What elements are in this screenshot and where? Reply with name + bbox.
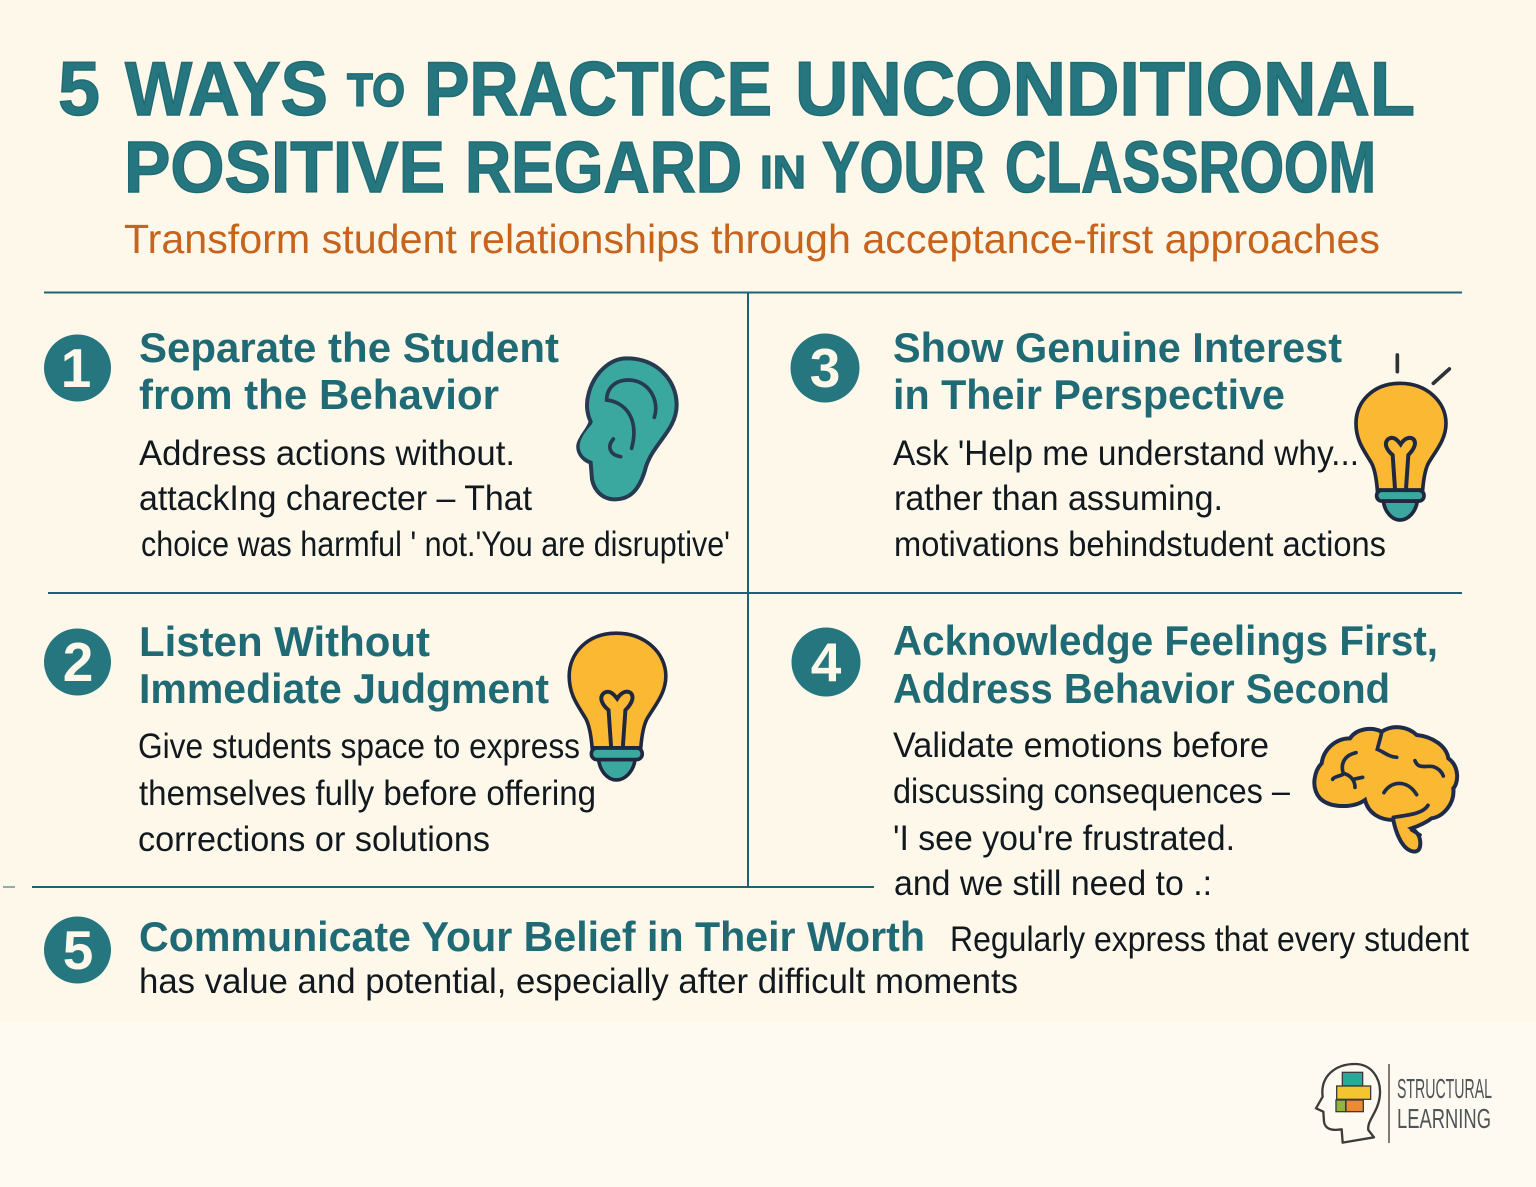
badge 4 <box>792 628 860 696</box>
icon: light bulb <box>1356 355 1449 520</box>
badge 5: 5 <box>63 919 93 981</box>
body 4: Validate emotions before <box>893 726 1269 765</box>
body 2 <box>138 727 596 859</box>
body 4 <box>893 726 1290 903</box>
title: 5 <box>58 47 100 132</box>
body 2: themselves fully before offering <box>139 774 596 813</box>
title: PRACTICE <box>424 47 772 132</box>
body 1 <box>139 434 730 564</box>
icon: head with blocks <box>1316 1064 1380 1143</box>
logo wordmark <box>1397 1073 1492 1134</box>
body 2: Give students space to express <box>138 727 580 766</box>
icon: brain <box>1314 727 1457 852</box>
title: CLASSROOM <box>1005 128 1376 208</box>
body 4: and we still need to .: <box>894 864 1212 903</box>
body 4: 'I see you're frustrated. <box>893 819 1235 858</box>
body 3: rather than assuming. <box>894 479 1223 518</box>
heading 1: Separate the Student <box>139 324 559 371</box>
title <box>58 47 1415 208</box>
heading 4 <box>893 617 1438 712</box>
panel: way 3 <box>790 324 1449 564</box>
heading 4: Acknowledge Feelings First, <box>893 617 1438 664</box>
icon: light bulb <box>569 633 666 780</box>
panel: way 2 <box>44 618 666 859</box>
body 3: Ask 'Help me understand why... <box>893 434 1359 473</box>
heading 1: from the Behavior <box>139 371 499 418</box>
body 3: motivations behindstudent actions <box>894 525 1386 564</box>
heading 2: Immediate Judgment <box>139 665 549 712</box>
heading 2: Listen Without <box>139 618 430 665</box>
body 5: Regularly express that every student <box>950 920 1469 959</box>
badge 5 <box>44 916 111 984</box>
title: REGARD <box>465 128 742 208</box>
logo wordmark: LEARNING <box>1397 1103 1491 1134</box>
badge 3 <box>790 334 860 402</box>
heading 3: Show Genuine Interest <box>893 324 1342 371</box>
badge 4: 4 <box>811 631 842 693</box>
panel: way 4 <box>792 617 1457 903</box>
subtitle: Transform student relationships through acceptance-first approaches <box>124 216 1380 262</box>
body 5 <box>139 920 1469 1001</box>
body 1: choice was harmful ' not.'You are disruptive' <box>141 525 730 564</box>
logo: Structural Learning <box>1316 1064 1492 1143</box>
badge 2: 2 <box>63 631 93 693</box>
panel: way 5 <box>44 913 1469 1001</box>
heading 2 <box>139 618 549 712</box>
heading 4: Address Behavior Second <box>893 665 1390 712</box>
icon: ear <box>578 358 677 499</box>
badge 2 <box>44 628 111 696</box>
title: POSITIVE <box>124 128 445 208</box>
panel: way 1 <box>44 324 730 564</box>
title: TO <box>347 64 405 116</box>
body 4: discussing consequences – <box>893 772 1290 811</box>
body 1: Address actions without. <box>139 434 515 473</box>
title: UNCONDITIONAL <box>795 47 1415 132</box>
body 3 <box>893 434 1386 564</box>
badge 1 <box>44 334 111 402</box>
title: IN <box>760 146 806 198</box>
body 2: corrections or solutions <box>138 820 490 859</box>
heading 3 <box>893 324 1342 418</box>
heading 5: Communicate Your Belief in Their Worth <box>139 913 925 960</box>
body 5: has value and potential, especially after difficult moments <box>139 962 1018 1001</box>
badge 1: 1 <box>61 337 91 399</box>
title: WAYS <box>125 47 328 132</box>
badge 3: 3 <box>810 337 840 399</box>
heading 1 <box>139 324 559 418</box>
heading 3: in Their Perspective <box>893 371 1285 418</box>
title: YOUR <box>822 128 985 208</box>
body 1: attackIng charecter – That <box>139 479 532 518</box>
